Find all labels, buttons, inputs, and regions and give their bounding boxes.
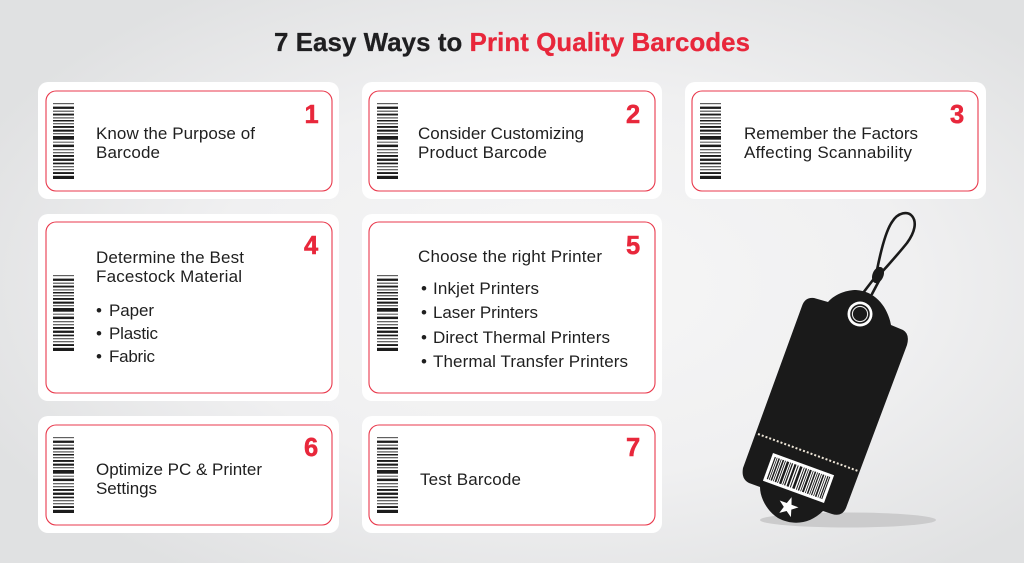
step number 3: 3: [950, 101, 964, 129]
step number 7: 7: [626, 434, 640, 462]
illustration: price tag with barcode: [743, 213, 936, 528]
tag perforation: [758, 434, 858, 471]
text: step 1: Know the Purpose of: [96, 124, 255, 143]
text: step 6: Settings: [96, 479, 157, 498]
panel: step 2: [362, 82, 662, 199]
tag eyelet: [848, 302, 872, 326]
tag shadow: [760, 512, 936, 528]
list: facestock materials: •: [96, 324, 102, 343]
tag string: [863, 213, 915, 294]
panel: step 4: [38, 214, 339, 401]
icon: barcode 5: [377, 275, 398, 351]
list: facestock materials: •: [96, 347, 102, 366]
icon: barcode 2: [377, 103, 398, 179]
panel: step 1: [38, 82, 339, 199]
panel: step 6: [38, 416, 339, 533]
panel: step 3: [685, 82, 986, 199]
text: step 6: Optimize PC & Printer: [96, 460, 262, 479]
tag star: [779, 497, 798, 517]
tag barcode: [763, 453, 834, 503]
list: facestock materials: Plastic: [109, 324, 158, 343]
title: 7 Easy Ways to Print Quality Barcodes: [274, 29, 750, 57]
list: printer types: •: [421, 279, 427, 298]
list: printer types: •: [421, 328, 427, 347]
tag body: [743, 290, 908, 523]
text: step 3: Remember the Factors: [744, 124, 918, 143]
list: printer types: •: [421, 303, 427, 322]
list: printer types: Inkjet Printers: [433, 279, 539, 298]
list: printer types: Laser Printers: [433, 303, 538, 322]
panel: step 5: [362, 214, 662, 401]
text: step 7: Test Barcode: [420, 470, 521, 489]
text: step 2: Consider Customizing: [418, 124, 584, 143]
list: printer types: •: [421, 352, 427, 371]
step number 2: 2: [626, 101, 640, 129]
step number 4: 4: [304, 232, 319, 260]
text: step 3: Affecting Scannability: [744, 143, 912, 162]
step number 5: 5: [626, 232, 640, 260]
list: printer types: Thermal Transfer Printers: [433, 352, 628, 371]
list: facestock materials: Fabric: [109, 347, 156, 366]
step number 6: 6: [304, 434, 318, 462]
step number 1: 1: [304, 101, 319, 129]
list: facestock materials: •: [96, 301, 102, 320]
icon: barcode 7: [377, 437, 398, 513]
icon: barcode 3: [700, 103, 721, 179]
list: facestock materials: Paper: [109, 301, 154, 320]
panel: step 7: [362, 416, 662, 533]
icon: barcode 4: [53, 275, 74, 351]
text: step 2: Product Barcode: [418, 143, 547, 162]
icon: barcode 1: [53, 103, 74, 179]
text: step 4 heading: Determine the Best: [96, 248, 244, 267]
text: step 5 heading: Choose the right Printer: [418, 247, 602, 266]
list: printer types: Direct Thermal Printers: [433, 328, 610, 347]
text: step 1: Barcode: [96, 143, 160, 162]
text: step 4 heading: Facestock Material: [96, 267, 242, 286]
icon: barcode 6: [53, 437, 74, 513]
